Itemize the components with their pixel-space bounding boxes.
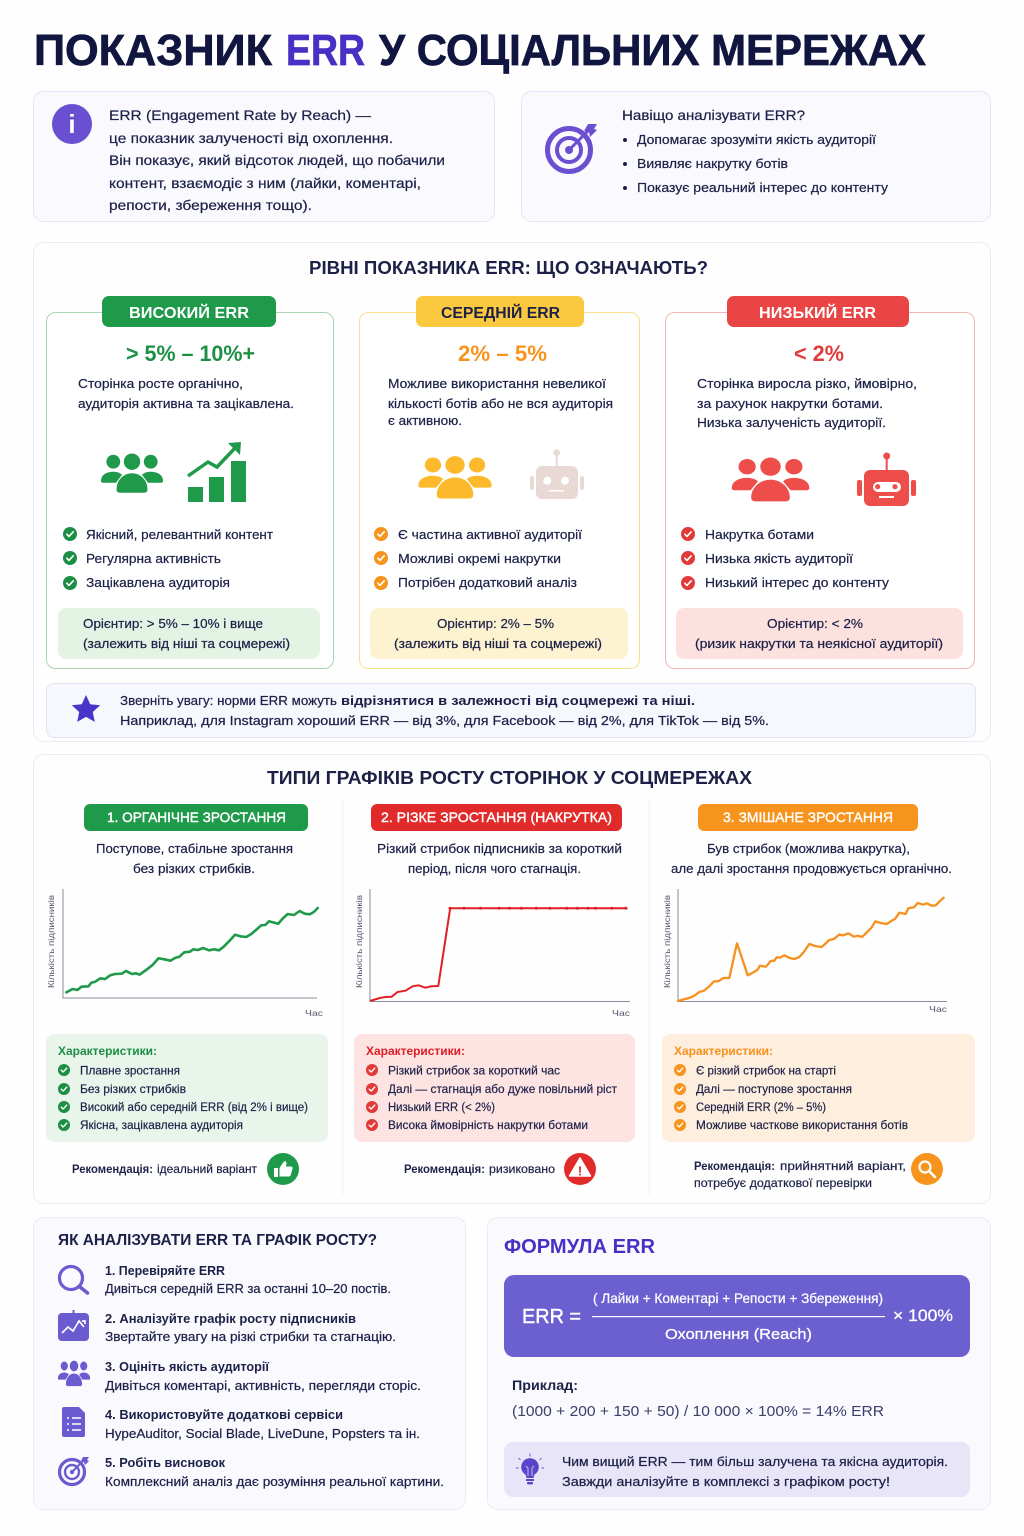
heading: РІВНІ ПОКАЗНИКА ERR: ЩО ОЗНАЧАЮТЬ? <box>309 258 708 278</box>
icon: audience <box>101 454 163 493</box>
characteristics: Якісна, зацікавлена аудиторія <box>80 1120 243 1132</box>
range: < 2% <box>794 341 844 366</box>
heading: ЯК АНАЛІЗУВАТИ ERR ТА ГРАФІК РОСТУ? <box>58 1232 377 1249</box>
tip box <box>504 1442 970 1497</box>
checklist: Потрібен додатковий аналіз <box>398 575 577 590</box>
description: кількості ботів або не вся аудиторія <box>388 396 613 411</box>
benchmark box: (залежить від ніші та соцмережі) <box>394 636 602 651</box>
definition text: контент, взаємодіє з ним (лайки, коментарі, <box>109 175 421 191</box>
step 4: HypeAuditor, Social Blade, LiveDune, Popsters та ін. <box>105 1426 420 1441</box>
card: medium ERR <box>360 296 640 668</box>
description <box>671 841 952 876</box>
icon: warning <box>564 1153 596 1185</box>
description: є активною. <box>388 413 462 428</box>
characteristics: Низький ERR (< 2%) <box>388 1102 495 1114</box>
characteristics: Висока ймовірність накрутки ботами <box>388 1120 588 1132</box>
definition text: Він показує, який відсоток людей, що побачили <box>109 152 445 168</box>
description <box>377 841 622 876</box>
step 3: 3. Оцініть якість аудиторії <box>105 1359 269 1374</box>
column: mixed growth <box>662 804 975 1190</box>
description <box>78 376 294 411</box>
benchmark box: Орієнтир: > 5% – 10% і вище <box>83 616 263 631</box>
description <box>388 376 613 428</box>
definition text: ERR (Engagement Rate by Reach) — <box>109 107 371 123</box>
characteristics: Далі — стагнація або дуже повільний ріст <box>388 1084 618 1096</box>
checklist: Накрутка ботами <box>705 527 814 542</box>
badge: СЕРЕДНІЙ ERR <box>441 303 560 322</box>
checklist: Зацікавлена аудиторія <box>86 575 230 590</box>
benchmark box <box>370 608 628 659</box>
description: Можливе використання невеликої <box>388 376 606 391</box>
checklist: Можливі окремі накрутки <box>398 551 561 566</box>
bullet list: Допомагає зрозуміти якість аудиторії <box>637 132 876 147</box>
checklist: Є частина активної аудиторії <box>398 527 582 542</box>
line chart <box>662 889 948 1014</box>
description: Сторінка виросла різко, ймовірно, <box>697 376 917 391</box>
formula box <box>504 1275 970 1357</box>
description: Низька залученість аудиторії. <box>697 415 886 430</box>
range: 2% – 5% <box>458 341 547 366</box>
description <box>697 376 917 430</box>
panel: growth chart types <box>34 754 990 1204</box>
line chart: Час <box>612 1008 631 1018</box>
badge <box>727 296 909 327</box>
line chart: Час <box>305 1008 324 1018</box>
note text: відрізнятися в залежності від соцмережі та ніші. <box>341 693 695 708</box>
step 2: 2. Аналізуйте графік росту підписників <box>105 1311 356 1326</box>
characteristics: Характеристики: <box>674 1044 773 1058</box>
characteristics <box>354 1034 635 1142</box>
recommendation: Рекомендація: <box>694 1161 775 1173</box>
benchmark box <box>676 608 963 659</box>
step 4 <box>62 1407 420 1441</box>
panel: ERR formula <box>488 1218 990 1510</box>
note text <box>120 693 769 728</box>
badge: 3. ЗМІШАНЕ ЗРОСТАННЯ <box>723 809 893 825</box>
checklist: Низька якість аудиторії <box>705 551 853 566</box>
recommendation: прийнятний варіант, <box>780 1161 906 1173</box>
characteristics <box>46 1034 328 1142</box>
icon: info: i <box>68 109 76 139</box>
example: Приклад: <box>512 1377 578 1393</box>
checklist <box>63 527 273 590</box>
heading: ТИПИ ГРАФІКІВ РОСТУ СТОРІНОК У СОЦМЕРЕЖАХ <box>267 768 752 788</box>
description: аудиторія активна та зацікавлена. <box>78 396 294 411</box>
formula box: Охоплення (Reach) <box>665 1326 812 1343</box>
characteristics: Різкий стрибок за короткий час <box>388 1066 560 1078</box>
icon: audience <box>732 458 809 501</box>
step 5 <box>60 1455 444 1489</box>
step 1 <box>60 1263 391 1296</box>
characteristics: Далі — поступове зростання <box>696 1084 852 1096</box>
line chart: Кількість підписників <box>662 894 672 988</box>
card: high ERR <box>46 296 334 668</box>
checklist <box>681 527 890 590</box>
badge: НИЗЬКИЙ ERR <box>759 303 876 322</box>
checklist: Якісний, релевантний контент <box>86 527 273 542</box>
column: sharp growth <box>354 804 635 1185</box>
description: Поступове, стабільне зростання <box>96 841 293 856</box>
characteristics: Можливе часткове використання ботів <box>696 1120 908 1132</box>
badge <box>102 296 276 327</box>
icon: target <box>60 1457 89 1484</box>
step 5: Комплексний аналіз дає розуміння реальної картини. <box>105 1474 444 1489</box>
icon: faded robot <box>530 449 584 499</box>
badge <box>84 804 308 831</box>
card: low ERR <box>666 296 974 668</box>
bullet list: Показує реальний інтерес до контенту <box>637 180 889 195</box>
bullet list <box>623 132 889 195</box>
icon: magnifier <box>911 1153 943 1185</box>
characteristics: Характеристики: <box>366 1044 465 1058</box>
icon: info <box>52 104 92 144</box>
checklist: Низький інтерес до контенту <box>705 575 890 590</box>
formula box: ERR = <box>522 1306 581 1328</box>
definition text: репости, збереження тощо). <box>109 197 312 213</box>
tip box: Завжди аналізуйте в комплексі з графіком росту! <box>562 1474 890 1489</box>
icon: audience <box>58 1361 90 1386</box>
note text: Зверніть увагу: норми ERR можуть <box>120 693 337 708</box>
characteristics: Плавне зростання <box>80 1066 180 1078</box>
benchmark box: Орієнтир: 2% – 5% <box>437 616 554 631</box>
step 3 <box>58 1359 421 1393</box>
title: У СОЦІАЛЬНИХ МЕРЕЖАХ <box>379 26 926 75</box>
icon: light bulb <box>516 1454 544 1484</box>
line chart: Кількість підписників <box>46 894 56 988</box>
icon: warning: ! <box>578 1164 582 1178</box>
range: > 5% – 10%+ <box>126 341 255 366</box>
step 3: Дивіться коментарі, активність, перегляди сторіс. <box>105 1378 421 1393</box>
benchmark box: (залежить від ніші та соцмережі) <box>83 636 290 651</box>
recommendation <box>72 1153 299 1185</box>
description: без різких стрибків. <box>133 861 255 876</box>
title <box>34 26 926 75</box>
formula box: × 100% <box>893 1306 953 1325</box>
icon: growth chart <box>58 1310 89 1341</box>
characteristics: Характеристики: <box>58 1044 157 1058</box>
characteristics: Є різкий стрибок на старті <box>696 1066 836 1078</box>
badge <box>416 296 584 327</box>
title: ERR <box>286 26 365 75</box>
line chart: Кількість підписників <box>354 894 364 988</box>
benchmark box: Орієнтир: < 2% <box>767 616 863 631</box>
recommendation <box>694 1153 943 1190</box>
definition text: це показник залученості від охоплення. <box>109 130 393 146</box>
characteristics: Високий або середній ERR (від 2% і вище) <box>80 1102 308 1114</box>
recommendation: ідеальний варіант <box>157 1164 258 1176</box>
badge <box>371 804 622 831</box>
badge <box>698 804 918 831</box>
example: (1000 + 200 + 150 + 50) / 10 000 × 100% = 14% ERR <box>512 1403 884 1420</box>
icon: target <box>548 124 597 172</box>
description: Був стрибок (можлива накрутка), <box>707 841 910 856</box>
characteristics: Без різких стрибків <box>80 1084 186 1096</box>
badge: 2. РІЗКЕ ЗРОСТАННЯ (НАКРУТКА) <box>381 809 612 825</box>
line chart <box>354 889 631 1018</box>
benchmark box: (ризик накрутки та неякісної аудиторії) <box>695 636 943 651</box>
heading: Навіщо аналізувати ERR? <box>622 107 805 123</box>
description: за рахунок накрутки ботами. <box>697 396 883 411</box>
step 1: 1. Перевіряйте ERR <box>105 1263 226 1278</box>
panel: ERR levels <box>34 242 990 742</box>
step 2: Звертайте увагу на різкі стрибки та стагнацію. <box>105 1329 396 1344</box>
line chart: Час <box>929 1004 948 1014</box>
note text: Наприклад, для Instagram хороший ERR — від 3%, для Facebook — від 2%, для TikTok — від 5%. <box>120 713 769 728</box>
characteristics <box>662 1034 975 1142</box>
badge: 1. ОРГАНІЧНЕ ЗРОСТАННЯ <box>107 809 286 825</box>
icon: star <box>72 695 100 722</box>
bullet list: Виявляє накрутку ботів <box>637 156 788 171</box>
description: Сторінка росте органічно, <box>78 376 243 391</box>
step 5: 5. Робіть висновок <box>105 1455 225 1470</box>
panel: what is ERR <box>34 92 494 222</box>
characteristics: Середній ERR (2% – 5%) <box>696 1102 826 1114</box>
tip box: Чим вищий ERR — тим більш залучена та якісна аудиторія. <box>562 1454 948 1469</box>
description: період, після чого стагнація. <box>408 861 581 876</box>
panel: why analyse ERR <box>522 92 990 222</box>
step 4: 4. Використовуйте додаткові сервіси <box>105 1407 343 1422</box>
badge: ВИСОКИЙ ERR <box>129 303 249 322</box>
panel: how to analyse <box>34 1218 466 1510</box>
description <box>96 841 293 876</box>
description: але далі зростання продовжується органічно. <box>671 861 952 876</box>
recommendation: Рекомендація: <box>72 1164 153 1176</box>
line chart <box>46 889 324 1018</box>
recommendation: Рекомендація: <box>404 1164 485 1176</box>
benchmark box <box>58 608 320 659</box>
checklist: Регулярна активність <box>86 551 221 566</box>
icon: robot <box>857 452 916 506</box>
description: Різкий стрибок підписників за короткий <box>377 841 622 856</box>
example <box>512 1377 884 1420</box>
icon: document <box>62 1407 85 1437</box>
step 1: Дивіться середній ERR за останні 10–20 постів. <box>105 1281 391 1296</box>
definition text <box>109 107 445 213</box>
heading: ФОРМУЛА ERR <box>504 1236 656 1258</box>
recommendation <box>404 1153 596 1185</box>
icon: audience <box>418 456 492 498</box>
title: ПОКАЗНИК <box>34 26 272 75</box>
icon: magnifier <box>60 1266 88 1293</box>
step 2 <box>58 1310 396 1344</box>
column: organic growth <box>46 804 328 1185</box>
checklist <box>374 527 582 590</box>
recommendation: потребує додаткової перевірки <box>694 1178 872 1190</box>
formula box: ( Лайки + Коментарі + Репости + Збереження) <box>593 1290 883 1306</box>
callout: note about norms <box>46 684 976 738</box>
icon: growth chart <box>188 442 246 502</box>
recommendation: ризиковано <box>489 1164 555 1176</box>
icon: thumbs up <box>267 1153 299 1185</box>
